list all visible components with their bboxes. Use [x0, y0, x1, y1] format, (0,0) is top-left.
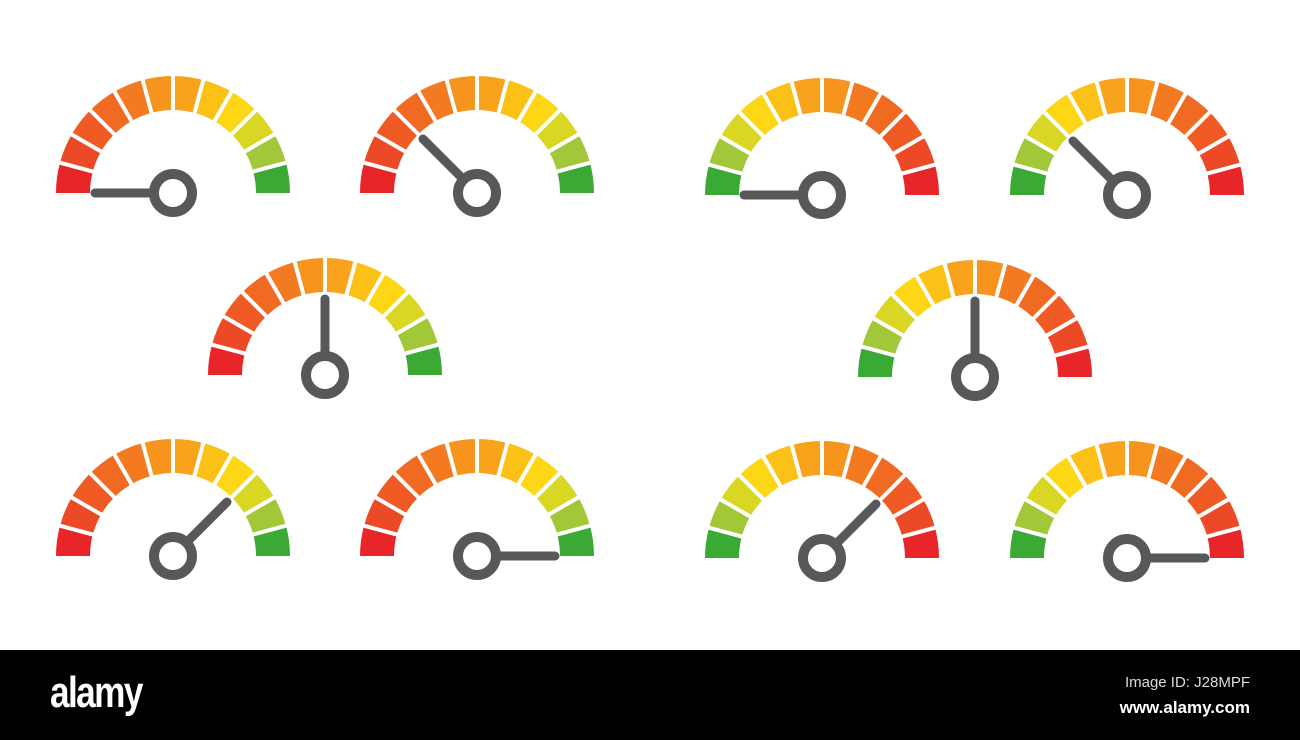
gauge 7	[57, 436, 289, 575]
gauge 5	[209, 255, 441, 394]
gauge 8	[361, 436, 593, 575]
gauge 4	[1011, 75, 1243, 214]
gauge 2	[361, 73, 593, 212]
gauge 10	[1011, 438, 1243, 577]
gauge 3	[706, 75, 938, 214]
watermark bar	[0, 650, 1300, 740]
website: www.alamy.com	[1120, 698, 1250, 717]
logo text: alamy	[50, 668, 142, 717]
gauge 6	[859, 257, 1091, 396]
image id: Image ID: J28MPF	[1125, 674, 1250, 691]
gauge 1	[57, 73, 289, 212]
gauge 9	[706, 438, 938, 577]
